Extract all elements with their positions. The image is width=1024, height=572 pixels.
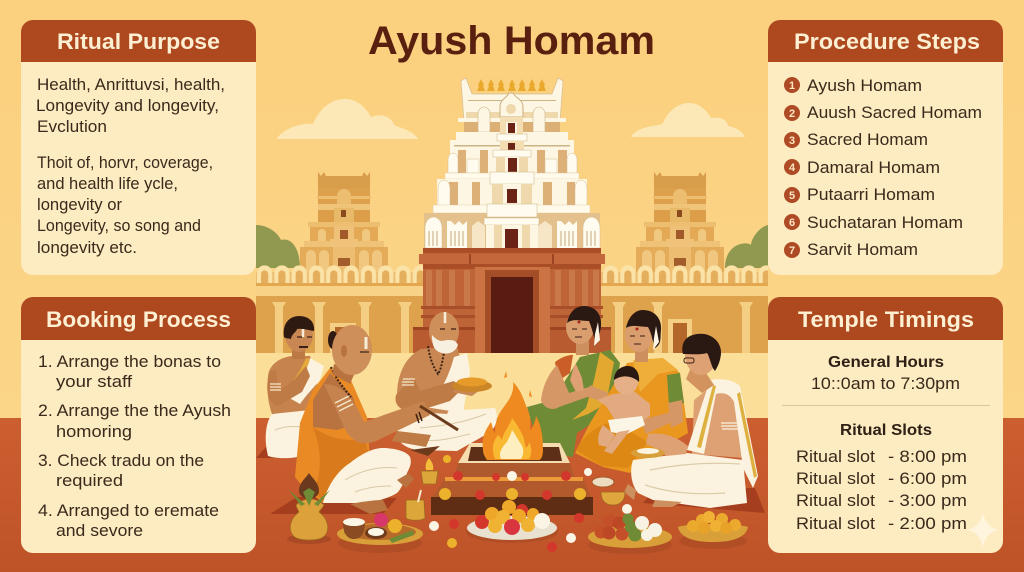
scattered flowers [429, 455, 632, 552]
text: booking steps: and sevore [56, 521, 143, 540]
arm [324, 384, 430, 443]
heading: Booking Process: Booking Process [46, 307, 231, 332]
text: ritual slots: Ritual slot [796, 491, 875, 510]
flames [483, 382, 543, 460]
dhoti [323, 448, 411, 503]
man with glasses and white stole [624, 334, 765, 513]
panel: Ritual Purpose [21, 20, 256, 275]
list: procedure steps: Sarvit Homam [807, 240, 918, 259]
temple brick base [413, 248, 611, 353]
woman with green saree [527, 306, 622, 457]
text: purpose lines: Longevity, so song and [37, 216, 201, 235]
heading: Procedure Steps [768, 20, 1003, 62]
cloud right [631, 103, 745, 137]
kalash with mango leaves [287, 473, 331, 544]
list: procedure steps: Putaarri Homam [807, 185, 935, 204]
list: procedure steps: Suchataran Homam [807, 213, 963, 232]
text: booking steps: 2. Arrange the the Ayush [38, 401, 231, 420]
list: procedure steps: 3 [789, 135, 795, 147]
head [332, 364, 356, 384]
icon: sparkle [967, 513, 999, 547]
person: main priest in orange robe [270, 325, 458, 514]
text: ritual slots: Ritual slot [796, 514, 875, 533]
side temple left [300, 172, 388, 281]
text: ritual slots: - 8:00 pm [888, 447, 967, 466]
text: purpose lines: and health life ycle, [37, 174, 178, 193]
heading: Booking Process [21, 297, 256, 340]
list: procedure steps [784, 76, 982, 259]
text: ritual slots: Ritual slot [796, 447, 875, 466]
title: Ayush Homam [368, 19, 655, 63]
text: booking steps: 3. Check tradu on the [38, 451, 204, 470]
necklace [331, 367, 351, 397]
text: ritual slots: Ritual Slots [840, 422, 932, 439]
small bowls [592, 477, 625, 505]
heading: Procedure Steps: Procedure Steps [794, 29, 980, 54]
central tower [500, 93, 523, 117]
text: ritual slots: - 6:00 pm [888, 469, 967, 488]
list: procedure steps: Damaral Homam [807, 158, 940, 177]
text: purpose lines: Health, Anrittuvsi, health, [37, 75, 225, 94]
panel: Booking Process [21, 297, 256, 553]
tier four [433, 205, 590, 213]
courtyard wall left and right [256, 265, 768, 353]
text: general hours [811, 354, 960, 393]
text: purpose lines: longevity or [37, 195, 122, 214]
text: ritual slots: Ritual slot [796, 469, 875, 488]
gold finials [477, 79, 546, 91]
heading: Temple Timings: Temple Timings [798, 307, 974, 332]
tier three [445, 173, 579, 179]
baby [597, 366, 650, 454]
list: procedure steps: Sacred Homam [807, 130, 928, 149]
temple doorway [491, 277, 533, 353]
text: ritual slots [796, 422, 967, 533]
list: procedure steps: 2 [789, 108, 795, 120]
trees left [256, 225, 300, 268]
text: purpose lines: Longevity and longevity, [36, 96, 219, 115]
woman with orange saree holding baby [575, 310, 688, 473]
plate with coconut and flowers [337, 513, 423, 553]
list: procedure steps: Auush Sacred Homam [807, 103, 982, 122]
text: booking steps: 4. Arranged to eremate [38, 501, 219, 520]
list: procedure steps: 4 [789, 162, 796, 174]
text: booking steps: your staff [56, 372, 132, 391]
list: procedure steps: 1 [789, 80, 795, 92]
plate of yellow sweets [678, 511, 748, 549]
ladles [420, 406, 458, 430]
panel: Temple Timings [768, 297, 1003, 553]
text: booking steps: 1. Arrange the bonas to [38, 352, 221, 371]
person: man with sash, back left [256, 316, 324, 458]
small lamp [421, 458, 438, 484]
altar tiers [431, 497, 593, 515]
text: purpose lines [36, 75, 225, 257]
list: procedure steps: 5 [789, 190, 795, 202]
main temple gopuram [424, 78, 600, 248]
cloud left [277, 99, 418, 139]
list: procedure steps: 7 [789, 245, 795, 257]
tier two [456, 132, 568, 140]
person: senior priest with white beard [396, 312, 497, 451]
temple crown [461, 78, 563, 121]
text: purpose lines: Evclution [37, 117, 107, 136]
trees right [725, 225, 768, 268]
floor [0, 418, 1024, 572]
text: ritual slots: - 3:00 pm [888, 491, 967, 510]
inner courtyard floor band [256, 353, 768, 418]
plate of sweets [588, 514, 672, 554]
side temple right [636, 172, 724, 281]
altar flowers [439, 471, 586, 500]
heading: Ritual Purpose [21, 20, 256, 62]
list: procedure steps: 6 [789, 217, 795, 229]
plate of offerings [452, 378, 492, 392]
heading: Ritual Purpose: Ritual Purpose [57, 29, 220, 54]
robe [295, 368, 370, 503]
text: general hours: General Hours [828, 354, 944, 371]
text: booking steps: required [56, 471, 123, 490]
text: purpose lines: longevity etc. [37, 238, 137, 257]
text: general hours: 10::0am to 7:30pm [811, 374, 960, 393]
homa fire pit [431, 371, 593, 515]
heading: Temple Timings [768, 297, 1003, 340]
list: procedure steps: Ayush Homam [807, 76, 922, 95]
text: booking steps: homoring [56, 422, 132, 441]
small gold pot [406, 490, 425, 520]
text: ritual slots: - 2:00 pm [888, 514, 967, 533]
panel: Procedure Steps [768, 20, 1003, 275]
text: booking steps [38, 352, 231, 540]
plate of flowers center [466, 500, 558, 543]
white stole [687, 379, 758, 488]
text: purpose lines: Thoit of, horvr, coverage, [37, 153, 213, 172]
background sky [0, 0, 1024, 418]
